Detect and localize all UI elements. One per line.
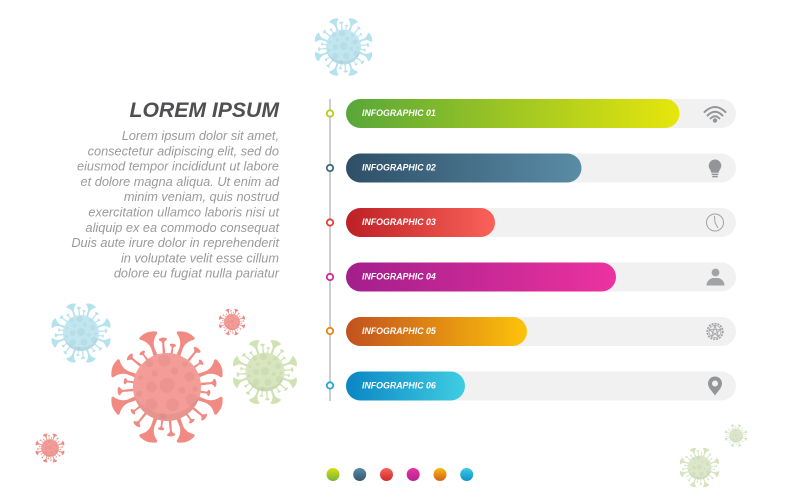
body text: consectetur adipiscing elit, sed do (88, 143, 279, 158)
body text (71, 128, 280, 281)
row 06 (346, 372, 736, 400)
body text: Duis aute irure dolor in reprehenderit (71, 235, 279, 250)
icon: location pin (708, 377, 722, 396)
legend dots (326, 468, 473, 481)
body text: Lorem ipsum dolor sit amet, (122, 128, 279, 143)
virus: top blue (314, 17, 373, 77)
bar 01 (346, 99, 680, 128)
row 02 (346, 154, 736, 182)
marker 04 (327, 274, 333, 280)
icon: person (706, 269, 724, 286)
marker 01 (327, 110, 333, 117)
marker 02 (327, 165, 333, 171)
row 04 (346, 262, 736, 292)
virus: small red lower (35, 433, 65, 463)
body text: aliquip ex ea commodo consequat (86, 220, 279, 235)
bar 06 (346, 372, 465, 400)
marker 06 (327, 382, 333, 389)
timeline (327, 99, 333, 401)
bar 05 (346, 317, 527, 346)
body text: exercitation ullamco laboris nisi ut (88, 204, 279, 220)
marker 05 (327, 328, 333, 334)
icon: clock (706, 214, 724, 231)
row 05 (346, 317, 736, 346)
body text: in voluptate velit esse cillum (121, 250, 279, 265)
label 06: INFOGRAPHIC 06 (362, 380, 436, 390)
bar 02 (346, 154, 582, 182)
label 04: INFOGRAPHIC 04 (362, 272, 436, 282)
row 03 (346, 208, 736, 237)
bar 04 (346, 262, 616, 292)
row 01 (346, 99, 736, 128)
body text: eiusmod tempor incididunt ut labore (77, 159, 279, 174)
body text: dolore eu fugiat nulla pariatur (114, 266, 280, 281)
virus: small red upper (218, 308, 246, 336)
virus: right green (232, 339, 298, 405)
icon: wheel (707, 324, 723, 339)
body text: minim veniam, quis nostrud (124, 189, 280, 204)
title: LOREM IPSUM (130, 99, 280, 122)
icon: wifi (704, 107, 726, 123)
virus: large red (109, 329, 225, 445)
label 02: INFOGRAPHIC 02 (362, 162, 436, 172)
label 05: INFOGRAPHIC 05 (362, 326, 436, 336)
virus: small green far right (724, 424, 748, 447)
icon: light bulb (709, 160, 721, 177)
label 01: INFOGRAPHIC 01 (362, 108, 436, 118)
body text: et dolore magna aliqua. Ut enim ad (81, 174, 280, 189)
label 03: INFOGRAPHIC 03 (362, 217, 436, 227)
virus: green lower right (679, 447, 720, 488)
virus: left blue (50, 302, 112, 364)
marker 03 (327, 219, 333, 226)
bar 03 (346, 208, 495, 237)
